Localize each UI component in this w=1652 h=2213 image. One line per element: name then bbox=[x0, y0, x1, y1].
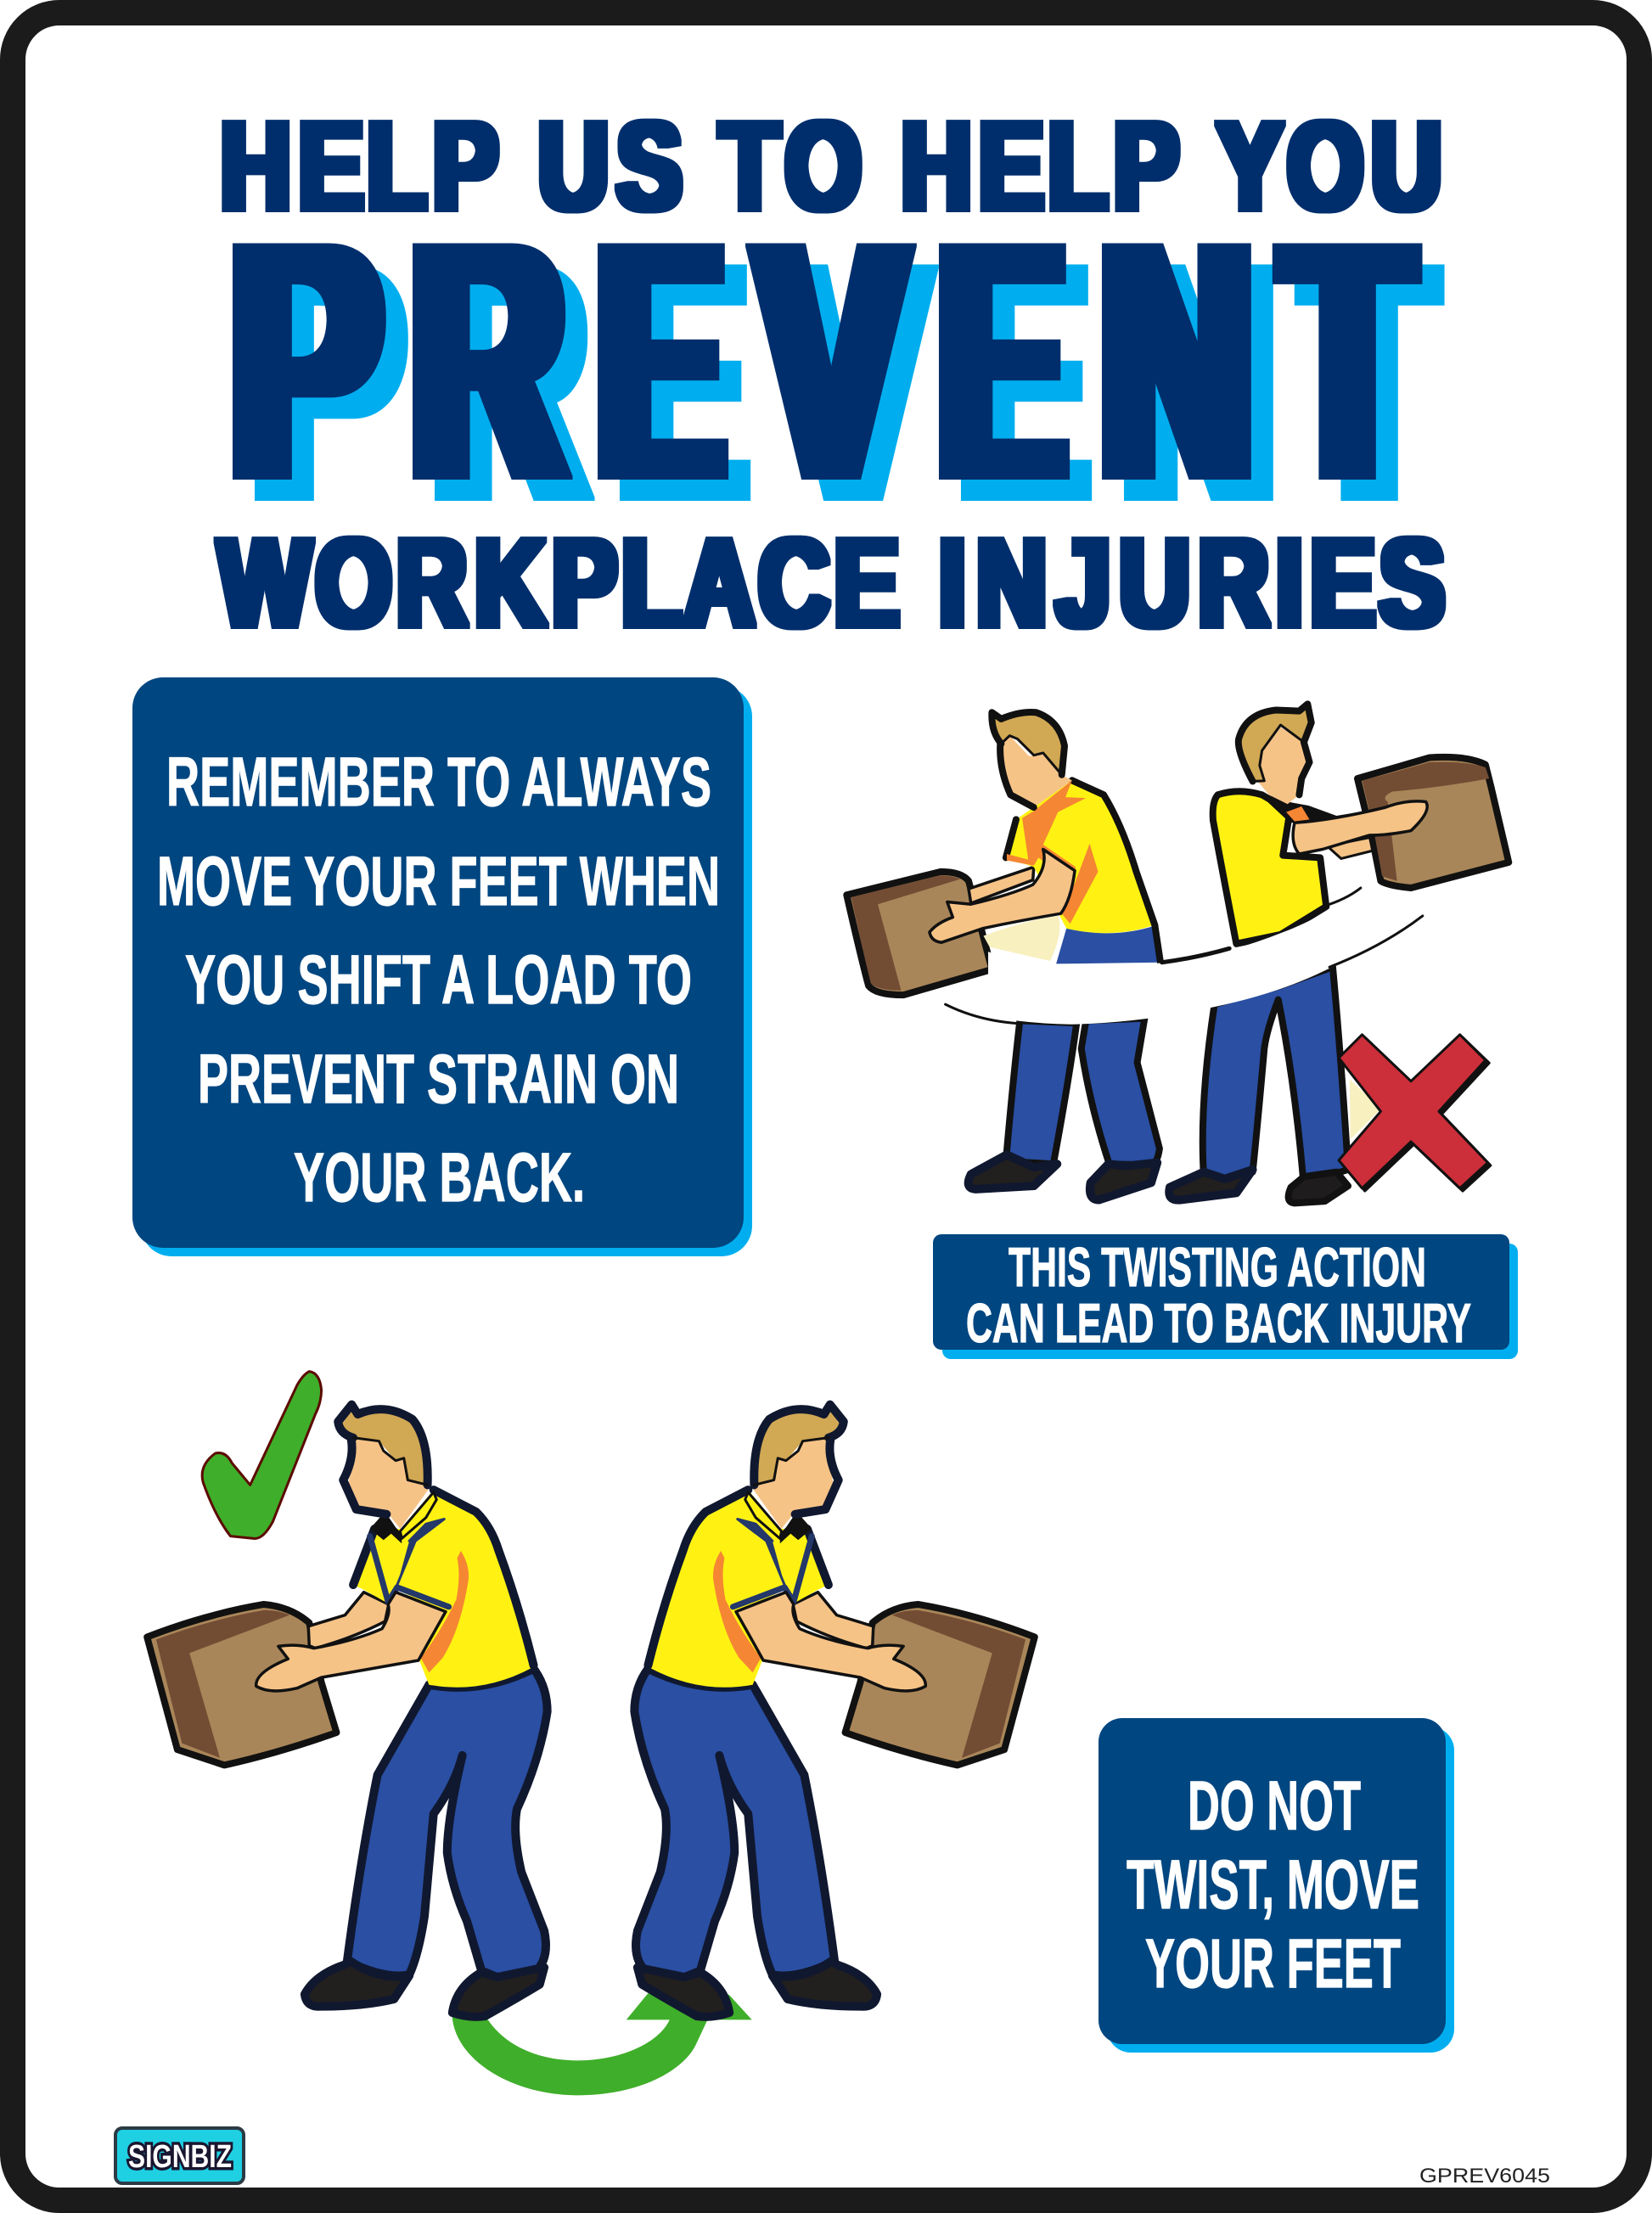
arrow: turn direction bbox=[452, 1993, 752, 2095]
logo: signbiz: SIGNBIZ bbox=[128, 2139, 232, 2175]
box left bbox=[846, 872, 992, 995]
legs right worker bbox=[1169, 967, 1348, 1203]
product code: GPREV6045 bbox=[1419, 2165, 1550, 2188]
title shadow: R bbox=[435, 193, 586, 571]
title shadow: E bbox=[621, 193, 745, 571]
shirt bbox=[353, 1490, 534, 1688]
box right bbox=[1357, 757, 1509, 888]
hair right worker bbox=[1239, 704, 1312, 781]
worker lifting correctly, right bbox=[634, 1405, 1035, 2017]
box carried bbox=[147, 1604, 336, 1765]
title: prevent bbox=[231, 171, 1433, 571]
title letters: V bbox=[757, 171, 906, 550]
hair left worker bbox=[992, 712, 1065, 775]
title shadow: V bbox=[779, 193, 928, 571]
title: workplace injuries: WORKPLACE INJURIES bbox=[218, 514, 1445, 654]
panel text: remember instructions: YOU SHIFT A LOAD TO bbox=[185, 941, 692, 1019]
panel text: remember instructions: PREVENT STRAIN ON bbox=[198, 1041, 679, 1118]
icon: green check mark bbox=[202, 1372, 322, 1538]
panel: do not twist bbox=[1099, 1718, 1454, 2053]
worker lifting correctly, left bbox=[147, 1405, 548, 2017]
title shadow: P bbox=[253, 193, 402, 571]
panel text: twisting warning bbox=[966, 1236, 1471, 1354]
title letters: E bbox=[598, 171, 722, 550]
panel text: do not twist: YOUR FEET bbox=[1145, 1925, 1401, 2002]
title letters: E bbox=[940, 171, 1064, 550]
panel text: do not twist: DO NOT bbox=[1188, 1767, 1361, 1845]
swoosh: twisting motion bbox=[946, 888, 1423, 1025]
title letters: T bbox=[1284, 171, 1411, 550]
title letters: R bbox=[413, 171, 564, 550]
panel: remember to always bbox=[132, 677, 752, 1256]
illustration: twisting workers bbox=[846, 704, 1509, 1203]
title: help us to help you: HELP US TO HELP YOU bbox=[221, 97, 1442, 237]
panel text: do not twist: TWIST, MOVE bbox=[1127, 1846, 1419, 1924]
title letters bbox=[231, 171, 1411, 550]
panel text: twisting warning: THIS TWISTING ACTION bbox=[1009, 1236, 1426, 1298]
title shadow: N bbox=[1124, 193, 1273, 571]
panel: twisting warning bbox=[933, 1234, 1518, 1359]
title letters: P bbox=[231, 171, 380, 550]
title letters: N bbox=[1102, 171, 1251, 550]
title shadow: T bbox=[1306, 193, 1433, 571]
shirt orange trim left worker bbox=[1007, 780, 1098, 924]
legs left worker bbox=[969, 1019, 1160, 1200]
panel text: remember instructions: MOVE YOUR FEET WHEN bbox=[157, 843, 720, 920]
worker twisting, right bbox=[1169, 704, 1509, 1203]
hair lifting worker bbox=[338, 1405, 428, 1485]
worker twisting, left bbox=[846, 712, 1160, 1200]
panel text: do not twist bbox=[1127, 1767, 1419, 2002]
panel text: remember instructions: REMEMBER TO ALWAYS bbox=[166, 744, 711, 821]
panel text: remember instructions bbox=[157, 744, 720, 1216]
title shadow: E bbox=[962, 193, 1086, 571]
panel text: remember instructions: YOUR BACK. bbox=[294, 1139, 585, 1216]
icon: red cross bbox=[1339, 1035, 1491, 1191]
title shadow bbox=[253, 193, 1433, 571]
logo: signbiz bbox=[115, 2128, 244, 2183]
